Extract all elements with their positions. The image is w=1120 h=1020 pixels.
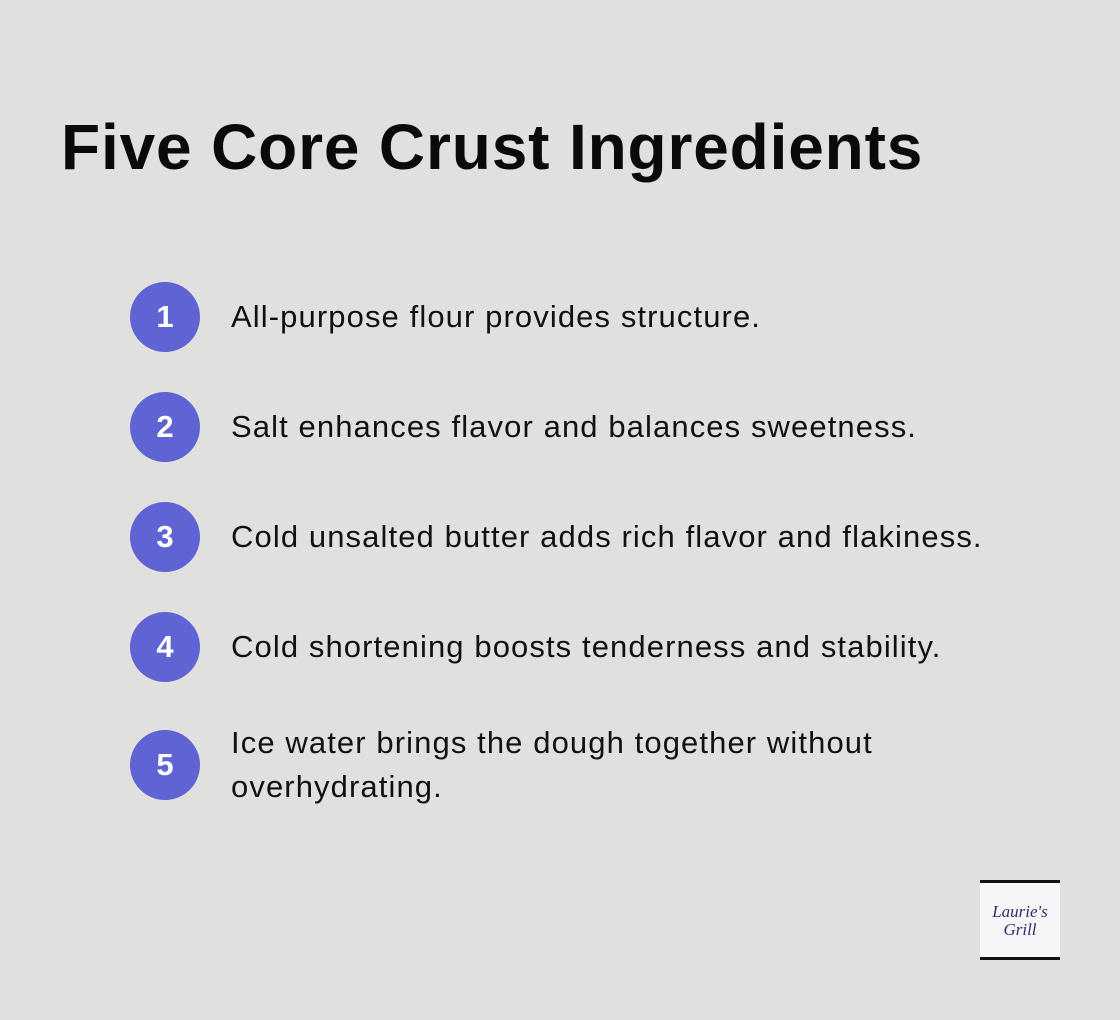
item 4: 4 [156, 629, 174, 664]
item 3: 3 [156, 519, 174, 554]
logo [980, 880, 1060, 960]
item 5 [130, 725, 873, 804]
item 5: Ice water brings the dough together without [231, 725, 873, 760]
item 4: Cold shortening boosts tenderness and stability. [231, 629, 942, 664]
item 3 [130, 502, 983, 572]
item 1: All-purpose flour provides structure. [231, 299, 761, 334]
item 1 [130, 282, 761, 352]
item 4 [130, 612, 942, 682]
logo: Laurie's [992, 902, 1048, 921]
title: Five Core Crust Ingredients [61, 111, 923, 183]
item 5: 5 [156, 747, 174, 782]
item 2: 2 [156, 409, 174, 444]
item 2: Salt enhances flavor and balances sweetness. [231, 409, 917, 444]
item 5: overhydrating. [231, 769, 443, 804]
item 3: Cold unsalted butter adds rich flavor and flakiness. [231, 519, 983, 554]
item 2 [130, 392, 917, 462]
logo: Grill [1003, 920, 1037, 939]
item 1: 1 [156, 299, 174, 334]
